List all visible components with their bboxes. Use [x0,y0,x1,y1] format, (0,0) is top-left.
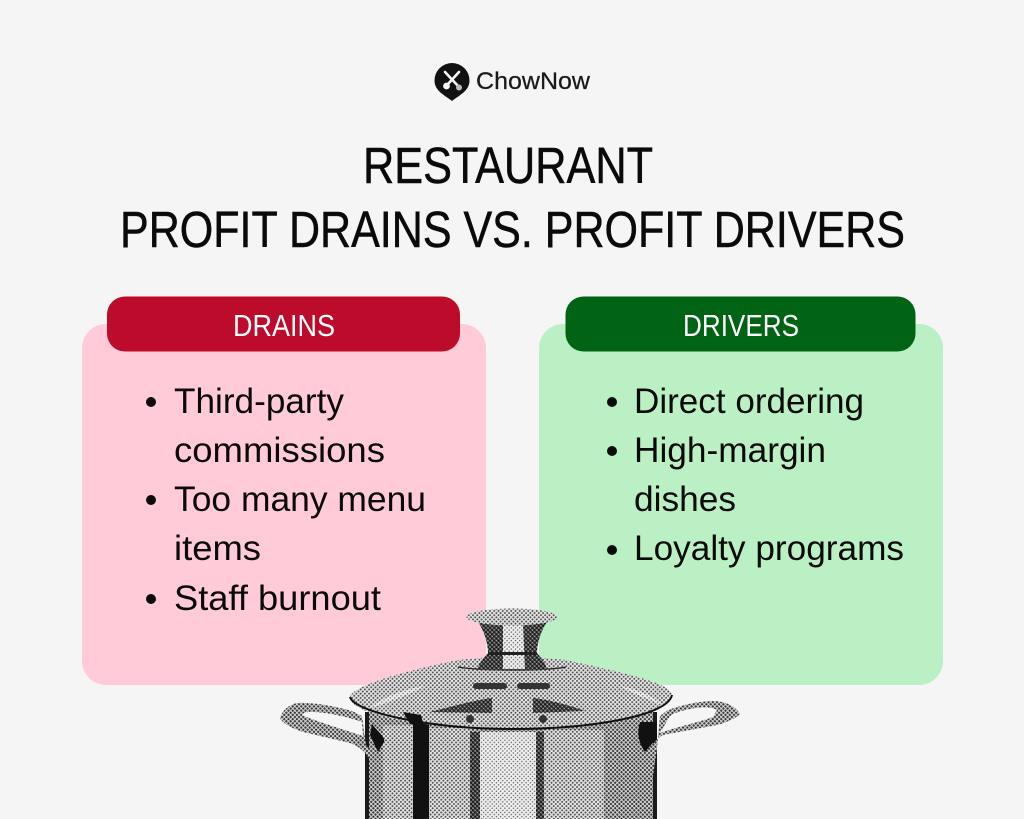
list: drains items: items [174,529,261,568]
pot lid [350,655,672,729]
heading: drains [107,296,460,352]
list: drivers items: High-margin [634,431,826,470]
list: drivers items [607,382,904,568]
logo: ChowNow [434,63,590,101]
list: drains items: Too many menu [174,480,426,519]
panel background: drains [82,324,486,685]
panel: drivers [539,296,943,685]
heading: drains: DRAINS [233,308,335,343]
list: drivers items: dishes [634,480,736,519]
list: drivers items: Loyalty programs [634,529,904,568]
list: drains items: Staff burnout [174,579,381,618]
pot left handle [280,703,381,788]
heading: drivers [566,296,916,352]
title: RESTAURANT [363,137,653,194]
panel: drains [82,296,486,685]
title: PROFIT DRAINS VS. PROFIT DRIVERS [120,201,905,258]
panel background: drivers [539,324,943,685]
title [120,137,905,258]
list: drains items: Third-party [174,382,344,421]
list: drains items: commissions [174,431,385,470]
icon: map pin with fork and spoon [434,63,470,101]
illustration: halftone cooking pot [280,608,740,819]
list: drivers items: Direct ordering [634,382,864,421]
pot lid knob [457,608,567,670]
heading: drivers: DRIVERS [683,308,799,343]
logo wordmark: ChowNow [476,68,590,95]
pot right handle [643,701,740,783]
pot body [365,712,657,819]
list: drains items [146,382,426,618]
